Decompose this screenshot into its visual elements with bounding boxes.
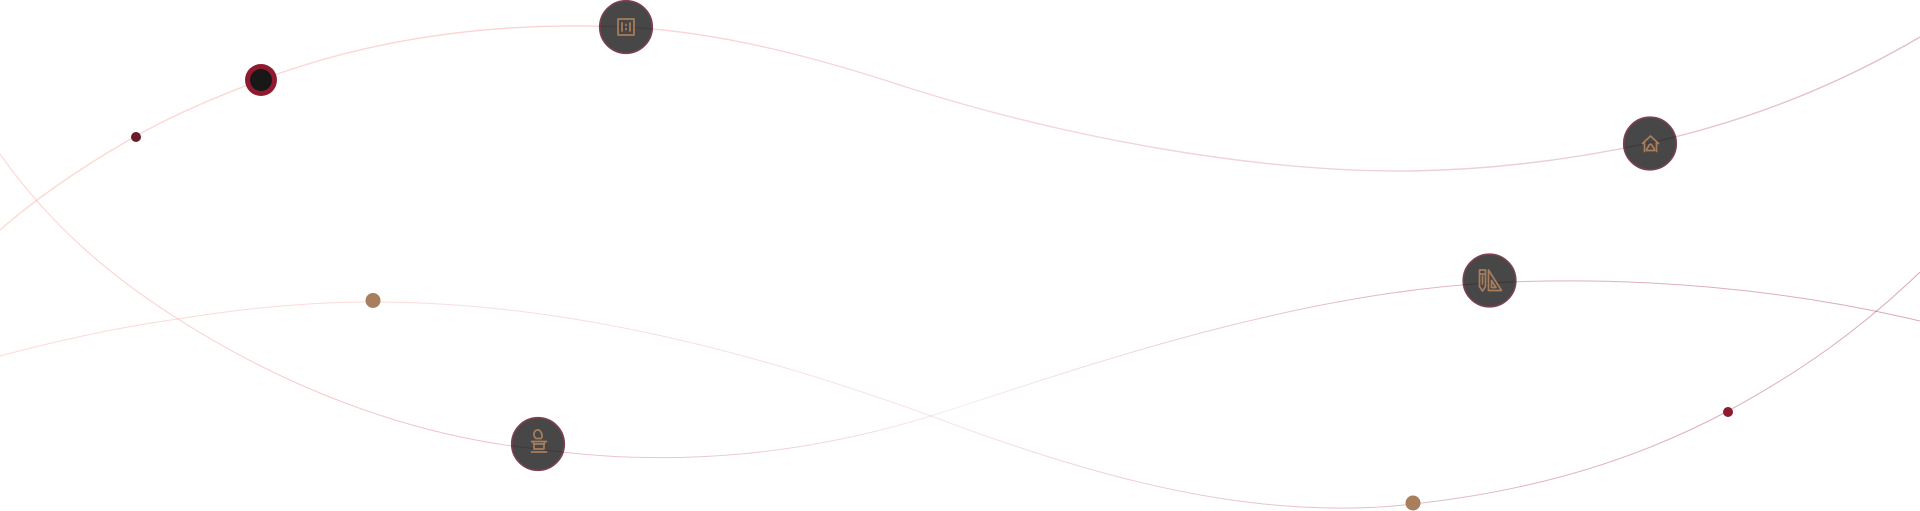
marker: small red dot right	[1723, 407, 1733, 417]
node: top square icon	[600, 1, 652, 53]
icon: pencil and set square	[1480, 270, 1502, 291]
curve: upper line	[0, 26, 1920, 230]
icon: framed ratio square	[618, 19, 634, 35]
marker: small dark red dot	[131, 132, 141, 142]
marker: tan dot left	[366, 293, 380, 308]
icon: pedestal with sculpture	[532, 430, 546, 452]
node: drafting tools	[1463, 254, 1516, 307]
node: home	[1624, 117, 1676, 170]
curve: lower sweeping line	[0, 154, 1920, 458]
icon: house	[1642, 136, 1658, 152]
marker: tan dot bottom	[1406, 496, 1420, 510]
curve: middle wave line	[0, 272, 1920, 508]
node: pedestal	[512, 418, 564, 470]
marker: large crimson ring	[245, 64, 277, 96]
